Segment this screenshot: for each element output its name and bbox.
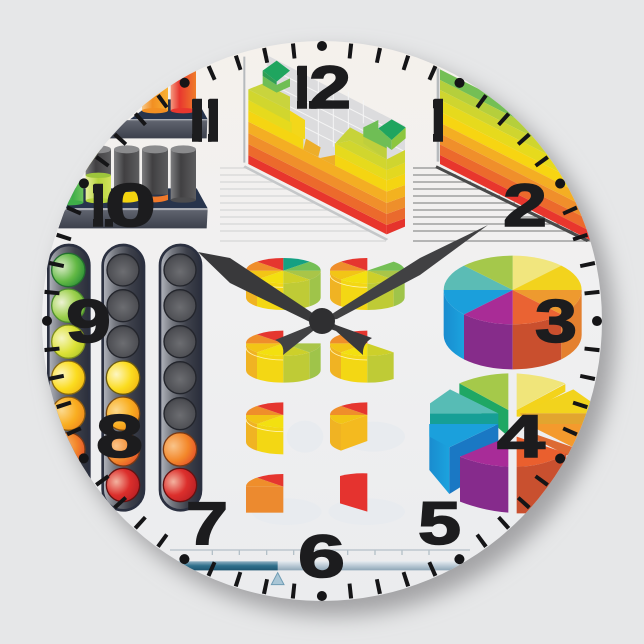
five-minute dots (47, 46, 597, 596)
minute tick marks (50, 50, 594, 592)
numeral 4: 4 (497, 403, 546, 470)
numeral 5: 5 (418, 490, 461, 557)
slider filled portion (177, 561, 278, 570)
numeral 3: 3 (535, 288, 577, 355)
numeral 10: 0 (105, 172, 156, 239)
panel: cylinder trays (57, 60, 208, 228)
chart: right isometric stacked bars (435, 68, 593, 242)
tube 1 (48, 245, 89, 510)
panel: small pie chart sequence (246, 258, 405, 525)
pie 2: one slice removed (330, 258, 405, 310)
numeral 9: 9 (66, 288, 111, 355)
panel: large pies (429, 256, 593, 513)
numeral 11: 11 (179, 87, 229, 154)
minute hand (275, 225, 488, 355)
pie shadows (252, 421, 405, 525)
slider track (177, 561, 463, 570)
axis wall (243, 57, 245, 163)
numeral 2: 2 (503, 172, 547, 239)
numeral 10: 1 (80, 172, 114, 239)
numeral 8: 8 (96, 403, 143, 470)
pie 1: full (246, 258, 321, 310)
clock face (42, 41, 602, 601)
floor lines: right chart (413, 168, 600, 241)
floor lines: middle chart (220, 168, 386, 241)
layers (440, 69, 593, 242)
pie 4: three slices removed (330, 331, 394, 383)
numeral 1: 1 (420, 87, 454, 154)
pie 5: half (246, 402, 283, 454)
numeral 12: 2 (309, 54, 351, 121)
base axis (243, 165, 388, 241)
pie 8: single slice (340, 473, 367, 512)
stacked layers (248, 83, 405, 234)
tube 3 (160, 245, 201, 510)
exploded pie (429, 373, 593, 513)
clock drop shadow (51, 52, 615, 616)
pie 6: three slices (330, 402, 367, 451)
right green cap (378, 119, 406, 150)
bottom slider scale (170, 550, 470, 585)
axis wall (437, 68, 439, 162)
numeral 12: 1 (284, 54, 317, 121)
panel: indicator tubes (48, 245, 201, 510)
pie 7: two slices (246, 474, 283, 513)
tube 2 (103, 245, 144, 510)
clock face artwork (48, 55, 600, 585)
hub (309, 308, 335, 334)
big pie (444, 256, 582, 369)
clock hands (198, 225, 488, 355)
back grid wall (266, 56, 405, 160)
base axis (435, 165, 590, 242)
chart: middle isometric stacked bars (243, 55, 406, 241)
slider marker (271, 573, 284, 585)
numeral 7: 7 (186, 490, 228, 557)
clock numerals (66, 54, 577, 590)
left green cap (263, 61, 290, 93)
scale line and ticks (170, 550, 470, 555)
numeral 6: 6 (298, 523, 345, 590)
pie 3: two slices removed (246, 331, 321, 383)
upper tray (110, 71, 208, 138)
lower tray (57, 145, 208, 228)
hour hand (198, 252, 372, 355)
